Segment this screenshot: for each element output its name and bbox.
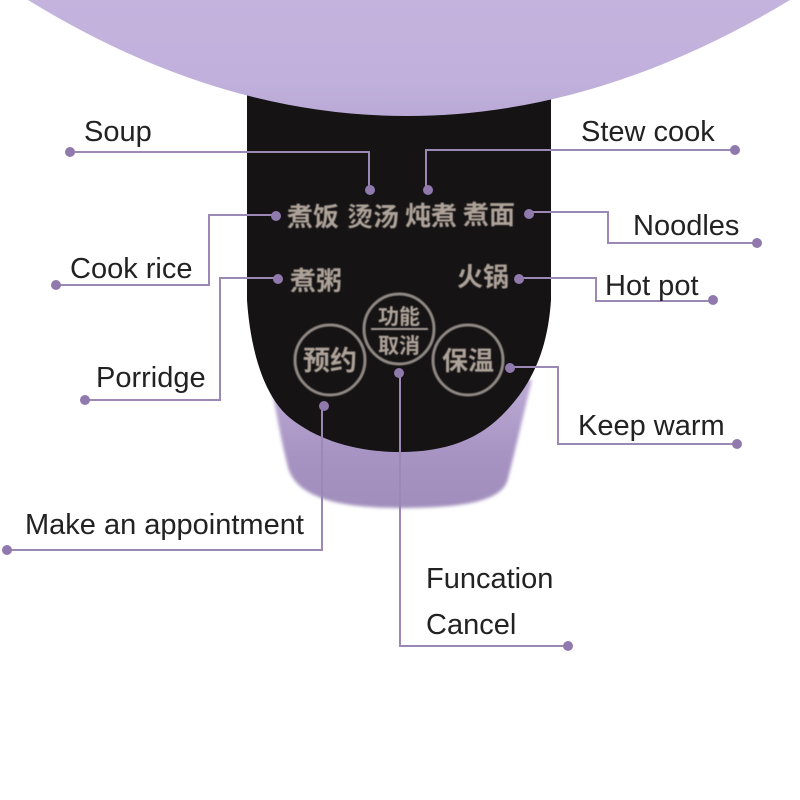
button: reservation: 预约 (303, 339, 357, 378)
callout: Hot pot: Hot pot (605, 270, 698, 302)
callout: Funcation Cancel: Cancel (426, 609, 516, 641)
callout: Make an appointment (2, 401, 329, 555)
callout: Funcation Cancel: Funcation (426, 563, 553, 595)
callout: Make an appointment: Make an appointment (25, 509, 304, 541)
callout: Porridge (80, 274, 283, 405)
label: 煮面: 煮面 (463, 195, 515, 232)
callout: Noodles: Noodles (633, 210, 739, 242)
label: 煮粥: 煮粥 (290, 261, 342, 298)
label: 烫汤: 烫汤 (347, 197, 399, 234)
label: 炖煮: 炖煮 (405, 196, 457, 233)
button: keep warm: 保温 (442, 341, 494, 378)
black control panel (247, 90, 551, 452)
callout: Cook rice (51, 211, 281, 290)
callout: Hot pot (514, 270, 718, 305)
button: function cancel: 功能 (378, 301, 420, 331)
label: 煮饭: 煮饭 (287, 197, 339, 234)
callout: Funcation Cancel (394, 368, 573, 651)
purple cooker base (270, 380, 532, 508)
callout: Soup: Soup (84, 116, 152, 148)
callout: Noodles (524, 209, 762, 248)
button: function cancel: 取消 (378, 330, 420, 360)
panel labels in Chinese (287, 195, 515, 298)
callout: Keep warm: Keep warm (578, 410, 725, 442)
callout: Cook rice: Cook rice (70, 253, 192, 285)
callout: Keep warm (505, 363, 742, 449)
button: keep warm (433, 325, 503, 395)
callout: Stew cook (423, 116, 740, 195)
label: 火锅: 火锅 (457, 257, 509, 294)
callout: Stew cook: Stew cook (581, 116, 715, 148)
button: reservation (295, 325, 365, 395)
callout: Porridge: Porridge (96, 362, 206, 394)
callout: Soup (65, 116, 375, 195)
button: function cancel (364, 294, 434, 364)
purple cooker bowl (28, 0, 790, 116)
